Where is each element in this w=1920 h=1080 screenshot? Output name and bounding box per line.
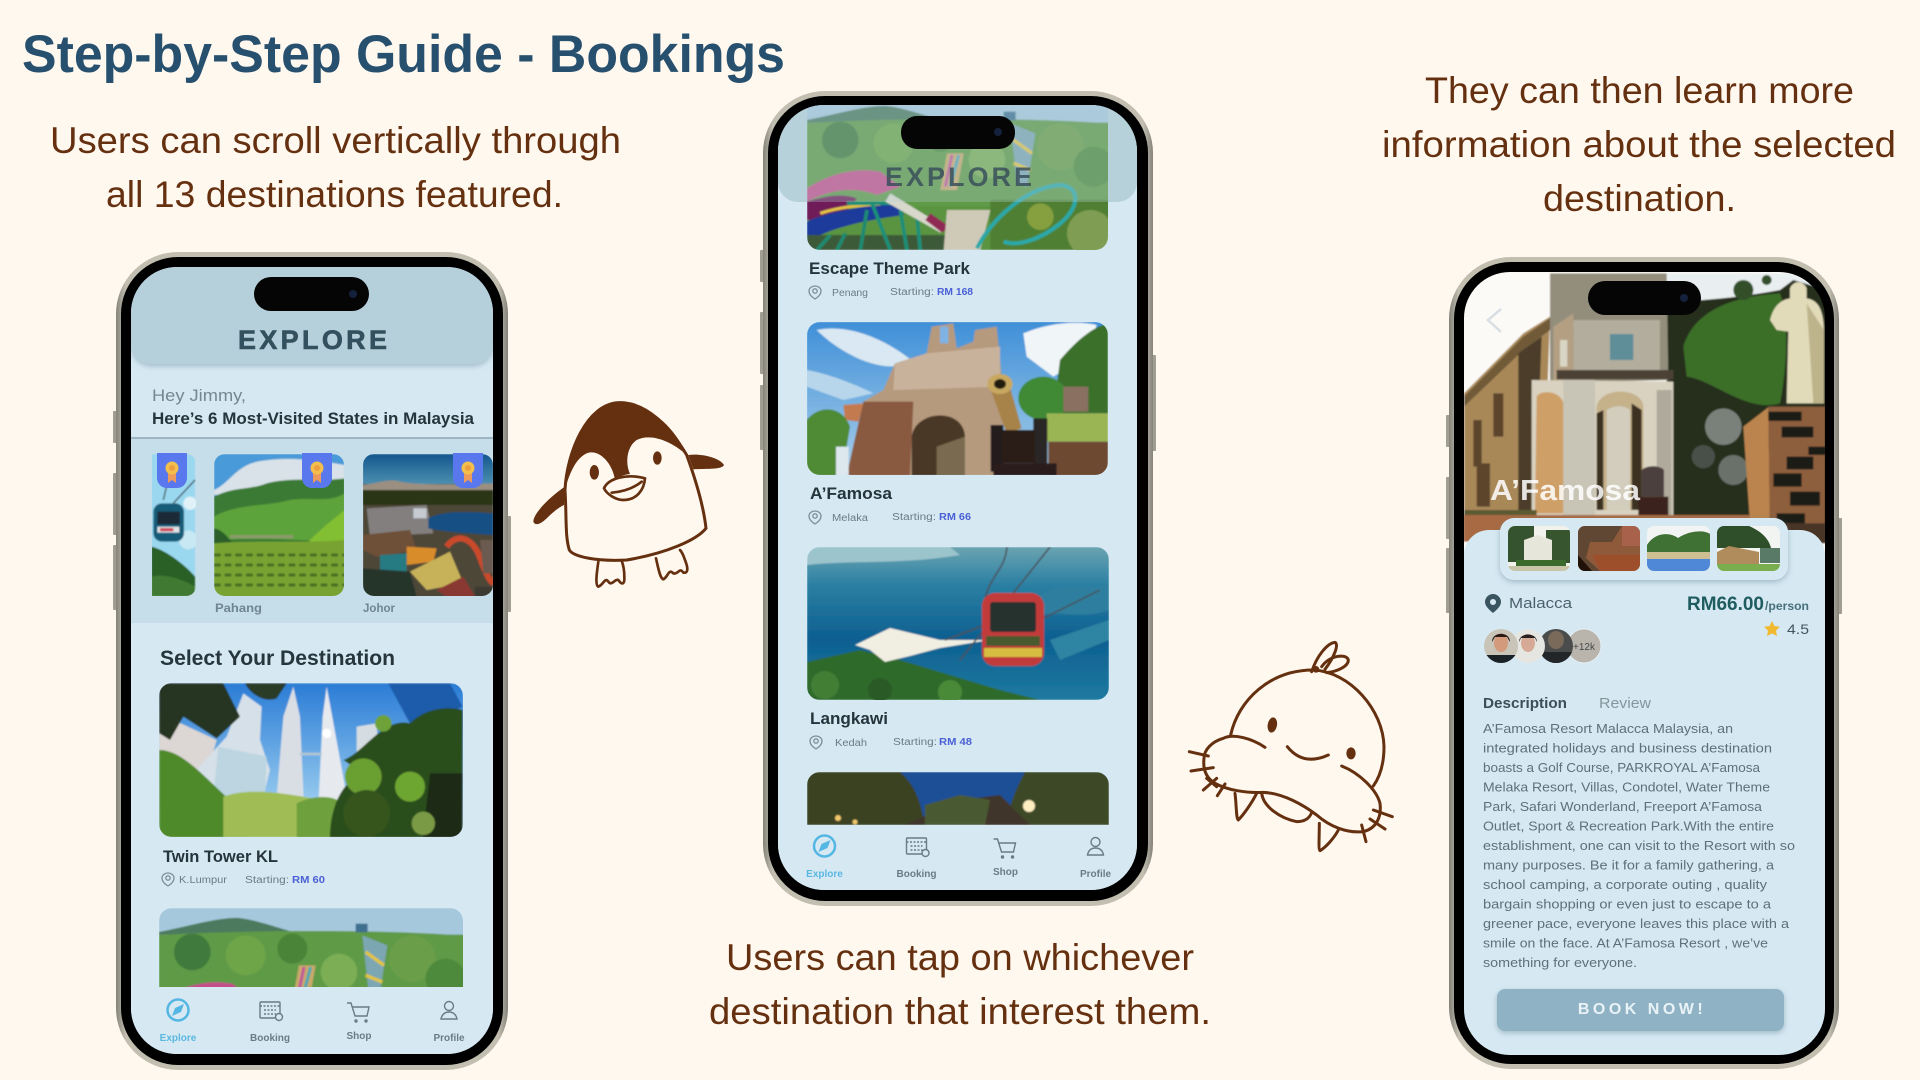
card: Langkawi: RM 48	[939, 737, 972, 748]
text block: learn more	[1382, 70, 1896, 219]
card: Escape Theme Park: Penang	[832, 288, 868, 299]
card: Langkawi: Langkawi	[810, 709, 888, 728]
section heading: Select Your Destination	[160, 647, 395, 670]
card: Escape Theme Park: Escape Theme Park	[809, 259, 971, 278]
button: book now	[1497, 989, 1784, 1031]
icon: booking calendar	[260, 1002, 282, 1020]
icon: profile	[441, 1002, 457, 1019]
notch	[1588, 281, 1701, 315]
header overlay: explore: EXPLORE	[885, 162, 1032, 192]
photo: Pahang	[214, 454, 345, 597]
text block: learn more: destination.	[1543, 178, 1736, 219]
notch	[254, 277, 369, 311]
badge	[157, 453, 187, 488]
card: Escape Theme Park: RM 168	[937, 287, 973, 298]
photo: A'Famosa church	[1460, 270, 1830, 560]
photo: Johor	[363, 454, 493, 597]
card: A'Famosa: A’Famosa	[810, 484, 893, 503]
card: A'Famosa	[807, 322, 1108, 524]
card: Twin Tower KL: K.Lumpur	[179, 875, 228, 886]
card: Escape Theme Park	[807, 96, 1114, 299]
icon: explore compass	[814, 836, 835, 856]
description text: many purposes. Be it for a family gathering, a	[1483, 858, 1774, 872]
avatars: +12k	[1573, 642, 1596, 653]
phone frame	[760, 91, 1156, 906]
tab bar: Booking	[896, 869, 936, 880]
icon: location pin	[810, 736, 822, 749]
phone frame	[1446, 257, 1842, 1069]
detail panel	[1464, 518, 1825, 1055]
description text: establishment, one can visit to the Resort with so	[1483, 839, 1795, 853]
text block: scroll instruction	[50, 120, 621, 215]
description text: A’Famosa Resort Malacca Malaysia, an	[1483, 722, 1733, 736]
description text: Outlet, Sport & Recreation Park.With the entire	[1483, 820, 1774, 834]
card: Langkawi: Kedah	[835, 738, 867, 749]
icon: shop cart	[994, 839, 1016, 858]
description text: integrated holidays and business destination	[1483, 742, 1772, 756]
header overlay: explore	[778, 105, 1137, 202]
tab bar: Shop	[346, 1031, 372, 1042]
description text: Melaka Resort, Villas, Condotel, Water Theme	[1483, 780, 1770, 794]
text block: learn more: information about the selected	[1382, 124, 1896, 165]
card: Twin Tower KL: Twin Tower KL	[163, 847, 278, 866]
text block: scroll instruction: Users can scroll vertically through	[50, 120, 621, 161]
location	[1485, 594, 1573, 613]
card: Twin Tower KL: RM 60	[292, 875, 325, 886]
photo: cable car	[151, 454, 198, 597]
text block: tap instruction: destination that interest them.	[709, 991, 1211, 1032]
card: Twin Tower KL: Starting:	[245, 875, 289, 886]
header: explore	[131, 267, 493, 364]
mascot: seal	[1189, 642, 1392, 851]
icon: location pin	[162, 873, 174, 886]
rating: 4.5	[1787, 621, 1809, 637]
card: night resort	[807, 772, 1109, 825]
tab: description: Description	[1483, 695, 1567, 712]
notch	[901, 116, 1015, 149]
avatars	[1484, 629, 1601, 663]
thumbnail 3	[1647, 526, 1710, 571]
tab bar: Shop	[993, 867, 1018, 878]
header backing	[778, 105, 1137, 202]
greeting: Hey Jimmy,	[152, 386, 246, 405]
tab bar	[131, 998, 493, 1054]
icon: location pin	[809, 286, 821, 299]
icon: location pin	[809, 511, 821, 524]
greeting: Here’s 6 Most-Visited States in Malaysia	[152, 409, 475, 428]
thumbnail 4	[1717, 526, 1780, 571]
card: A'Famosa: Melaka	[832, 513, 868, 524]
card: Escape Theme Park: Starting:	[890, 287, 934, 298]
card: Langkawi: Starting:	[893, 737, 937, 748]
badge	[302, 453, 332, 488]
text block: scroll instruction: all 13 destinations featured.	[106, 174, 563, 215]
phone frame	[113, 252, 511, 1070]
text block: learn more: They can then learn more	[1425, 70, 1854, 111]
photo: cable car over sea	[807, 547, 1109, 704]
description text: greener pace, everyone leaves this place with a	[1483, 917, 1789, 931]
description text	[1483, 722, 1795, 970]
card: A'Famosa: RM 66	[939, 512, 971, 523]
price: /person	[1765, 599, 1809, 613]
card: A'Famosa: Starting:	[892, 512, 936, 523]
phone: destination list	[760, 91, 1156, 906]
thumbnail 1	[1508, 526, 1570, 571]
location: Malacca	[1509, 595, 1573, 612]
icon: location pin	[1485, 594, 1501, 613]
card: Langkawi	[807, 547, 1109, 749]
icon: booking calendar	[906, 838, 929, 856]
card: theme park	[159, 908, 463, 987]
tab bar: Explore	[160, 1033, 197, 1044]
tab bar: Profile	[1080, 869, 1111, 880]
photo: twin towers	[159, 683, 463, 837]
icon: shop cart	[347, 1003, 369, 1022]
description text: boasts a Golf Course, PARKROYAL A’Famosa	[1483, 761, 1760, 775]
icon: back chevron	[1488, 309, 1501, 332]
most-visited states band	[131, 437, 493, 623]
thumbnail 2	[1578, 526, 1640, 571]
icon: profile	[1088, 838, 1104, 855]
price: RM66.00	[1687, 594, 1764, 615]
description text: Park, Safari Wonderland, Freeport A’Famosa	[1483, 800, 1762, 814]
greeting	[152, 386, 475, 428]
phone: explore screen	[113, 252, 511, 1070]
tab: review: Review	[1599, 695, 1651, 712]
description text: bargain shopping or even just to escape to a	[1483, 898, 1771, 912]
photo title: A’Famosa	[1490, 475, 1641, 507]
description text: school camping, a corporate outing , quality	[1483, 878, 1768, 892]
phone: destination detail	[1446, 257, 1842, 1069]
state label: Johor: Johor	[363, 601, 395, 615]
tab bar: Booking	[250, 1033, 290, 1044]
header: explore: EXPLORE	[238, 325, 387, 355]
price	[1687, 594, 1809, 615]
button: book now: BOOK NOW!	[1578, 1001, 1706, 1018]
mascot: penguin	[533, 403, 724, 587]
rating	[1764, 621, 1809, 637]
title: Step-by-Step Guide - Bookings	[22, 25, 785, 84]
tab bar: Profile	[433, 1033, 465, 1044]
text block: tap instruction	[709, 937, 1211, 1032]
tab bar: Explore	[806, 869, 843, 880]
text block: tap instruction: Users can tap on whichever	[726, 937, 1194, 978]
photo: A'Famosa ruin	[807, 322, 1108, 476]
state label: Pahang: Pahang	[215, 601, 262, 615]
tab bar	[778, 834, 1137, 890]
badge	[453, 453, 483, 488]
description text: smile on the face. At A’Famosa Resort , we’ve	[1483, 936, 1768, 950]
thumbnail strip	[1500, 518, 1788, 580]
description text: something for everyone.	[1483, 956, 1637, 970]
icon: explore compass	[168, 1000, 188, 1020]
card: Twin Tower KL	[159, 683, 463, 886]
